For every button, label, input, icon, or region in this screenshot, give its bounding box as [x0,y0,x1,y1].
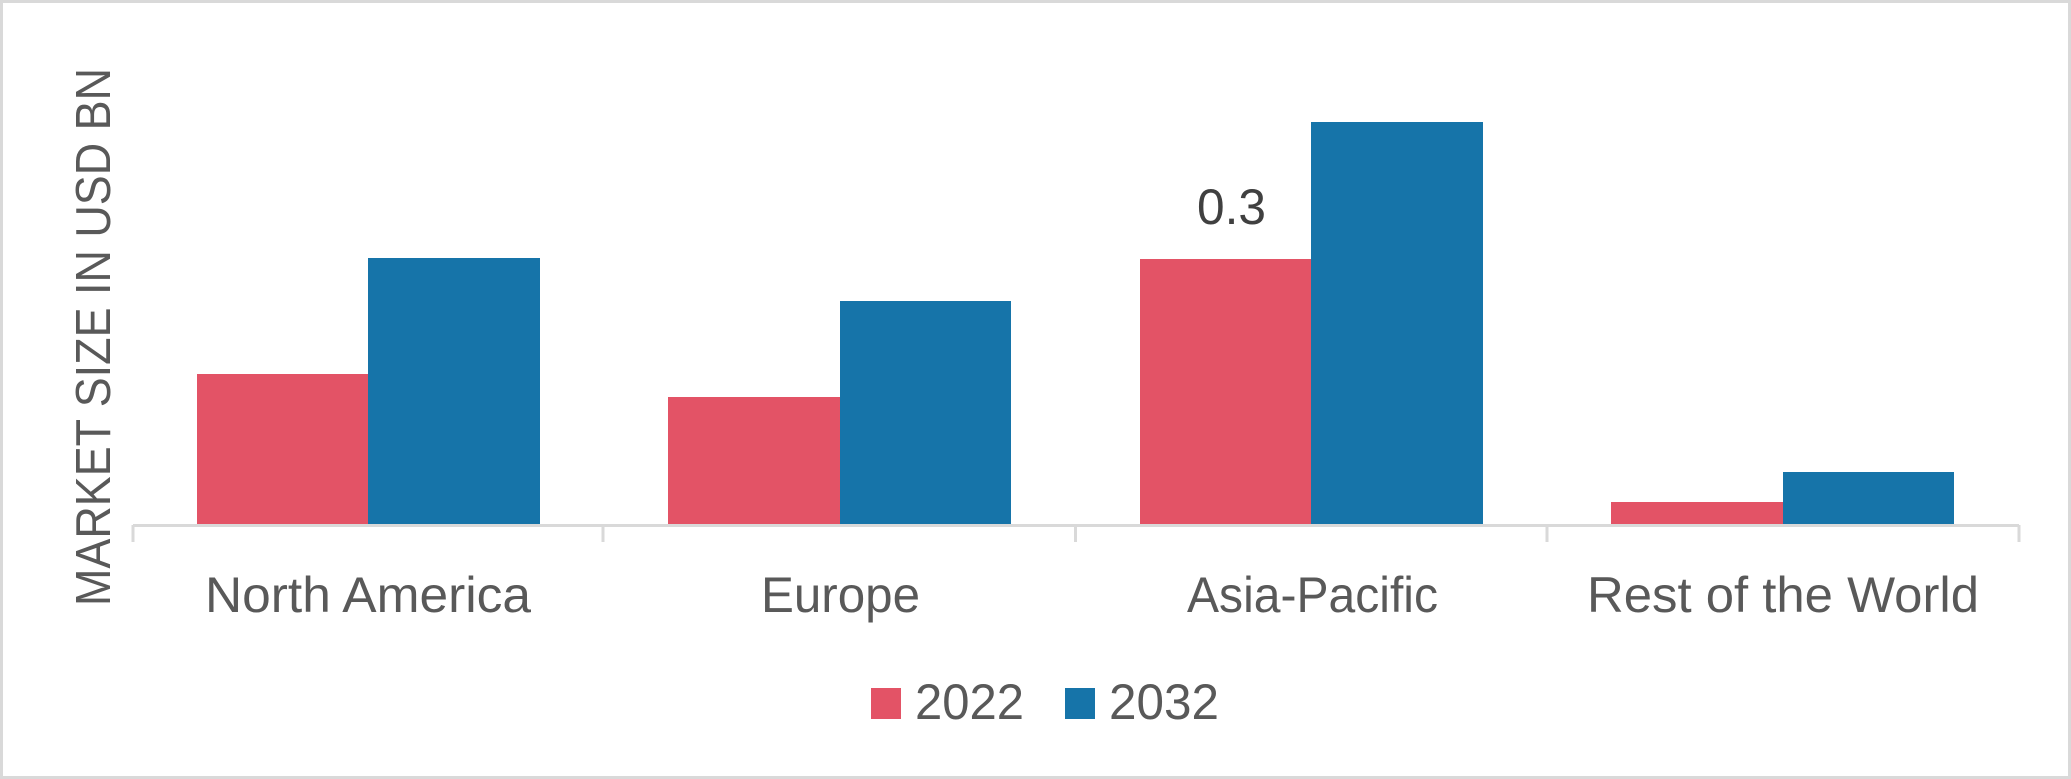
legend: 2032 [1109,674,1219,730]
bars: Asia-Pacific [1140,122,1483,524]
category labels: Rest of the World [1587,567,1979,623]
data label: Asia-Pacific 2022: 0.3 [1197,179,1266,235]
category labels: Europe [761,567,920,623]
category labels: North America [205,567,531,623]
legend [871,674,1219,730]
category labels: Asia-Pacific [1187,567,1438,623]
bars: Rest of the World [1611,472,1954,524]
bars: Europe [668,301,1011,524]
x axis with ticks [133,525,2019,542]
bars: North America [197,258,540,524]
category labels [205,567,1979,623]
y-axis title: MARKET SIZE IN USD BN [67,68,121,606]
legend: 2022 [915,674,1024,730]
